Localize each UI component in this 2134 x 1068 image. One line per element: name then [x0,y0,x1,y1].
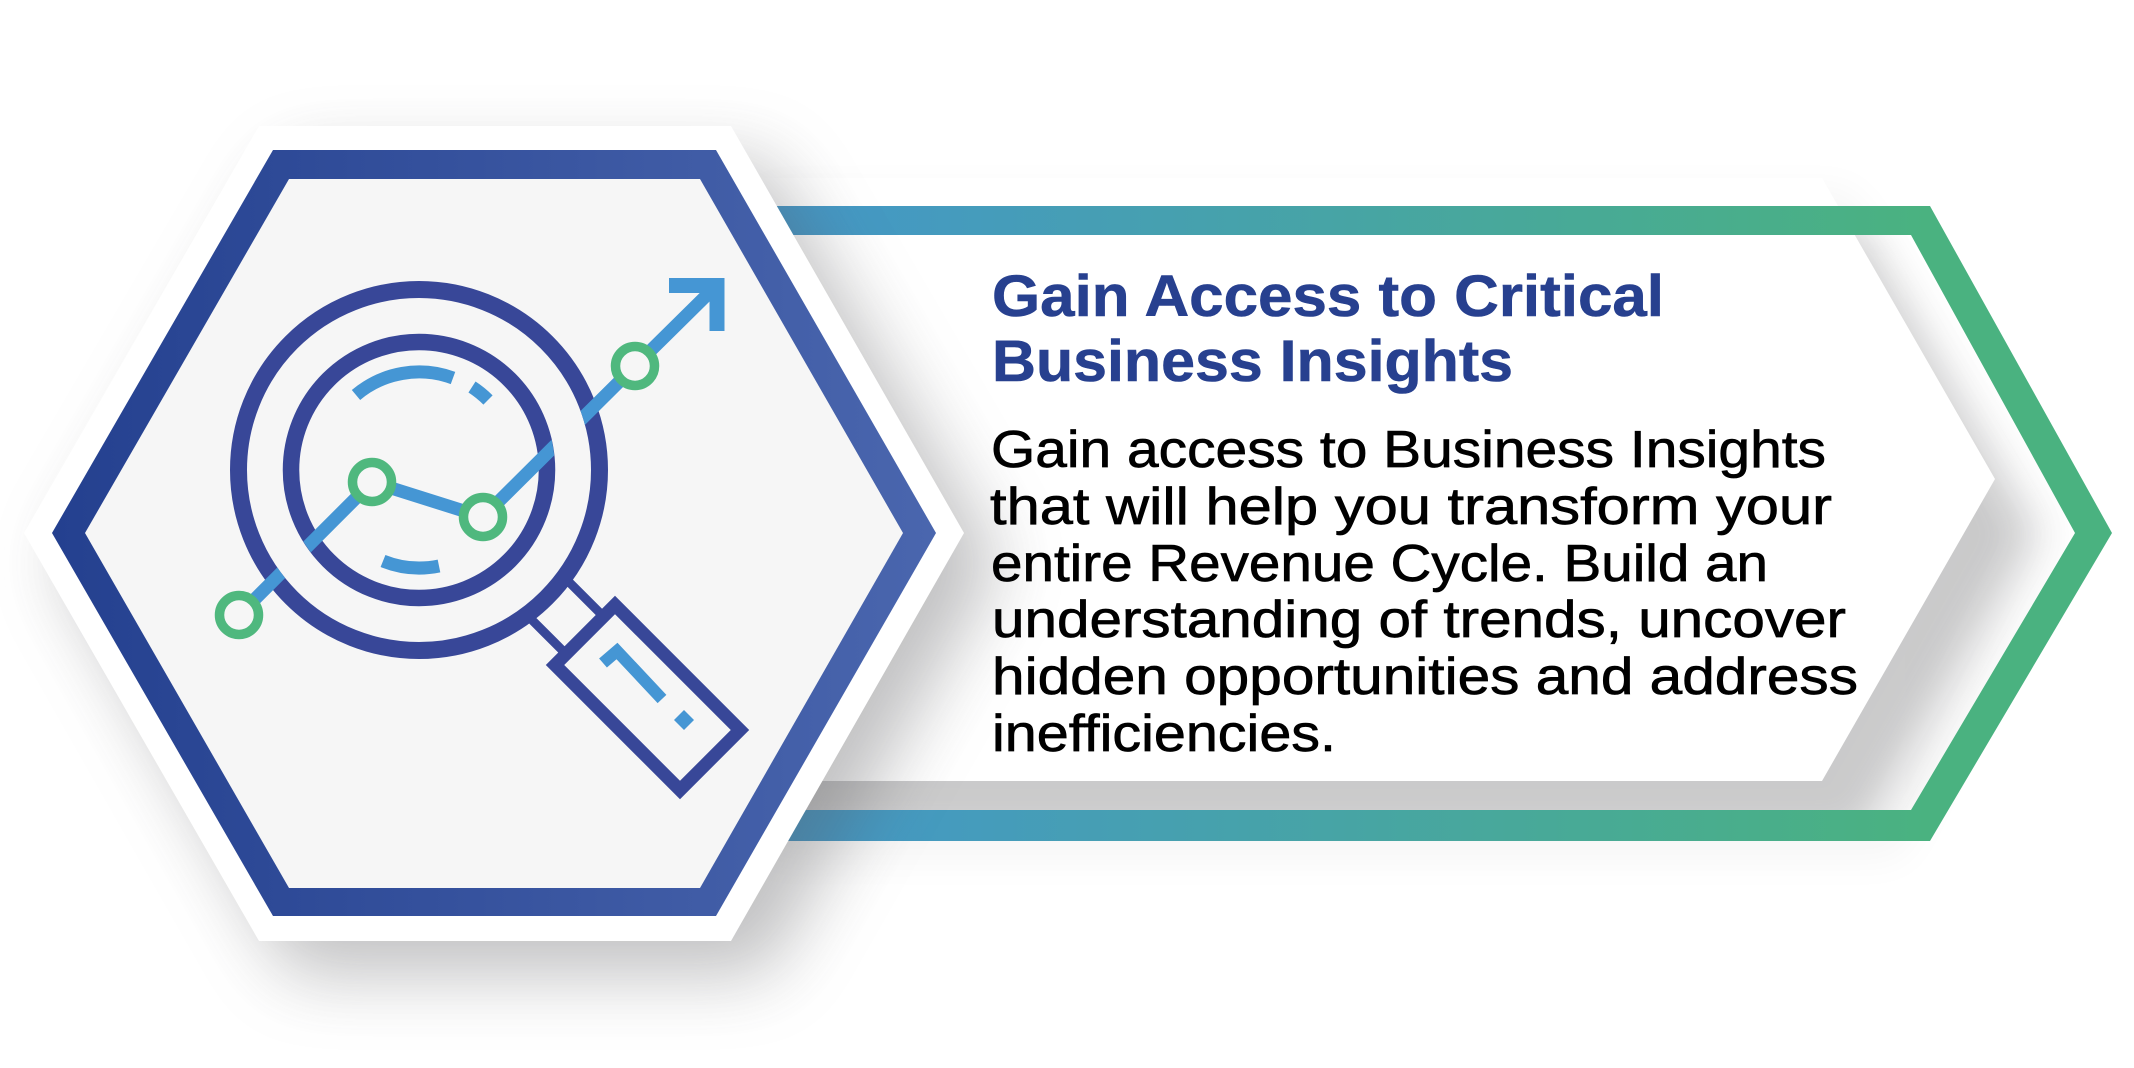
arrow inner grey shadow [806,235,2042,810]
icon: magnifying glass over trend line [220,286,740,790]
body text: inefficiencies. [992,705,1336,763]
heading: Business Insights [992,329,1513,394]
body text: Gain access to Business Insights [991,421,1826,479]
handle dot [674,710,694,730]
lens glints [356,372,488,568]
arrow white panel [700,178,1995,781]
body text [990,421,1858,763]
magnifier handle [555,605,740,790]
trend line [239,287,715,615]
hexagon blue frame [52,150,936,916]
body text: hidden opportunities and address [992,648,1858,706]
icon: arrow head [669,286,717,331]
hexagon white border [24,126,964,941]
panel: hexagon [24,126,964,941]
hexagon inner fill [85,179,903,888]
magnifier neck [528,578,604,654]
heading: Gain Access to Critical [992,264,1664,329]
body text: understanding of trends, uncover [992,591,1846,649]
arrow gradient band [700,206,2112,841]
hexagon shadow [58,160,1000,975]
magnifier rings [238,290,600,650]
heading [992,264,1664,394]
panel: arrow [776,206,2112,841]
arrow outer faint shadow [760,190,2060,860]
body text: that will help you transform your [990,478,1832,536]
green data points [220,346,654,634]
body text: entire Revenue Cycle. Build an [991,535,1768,593]
handle highlight [603,651,662,699]
